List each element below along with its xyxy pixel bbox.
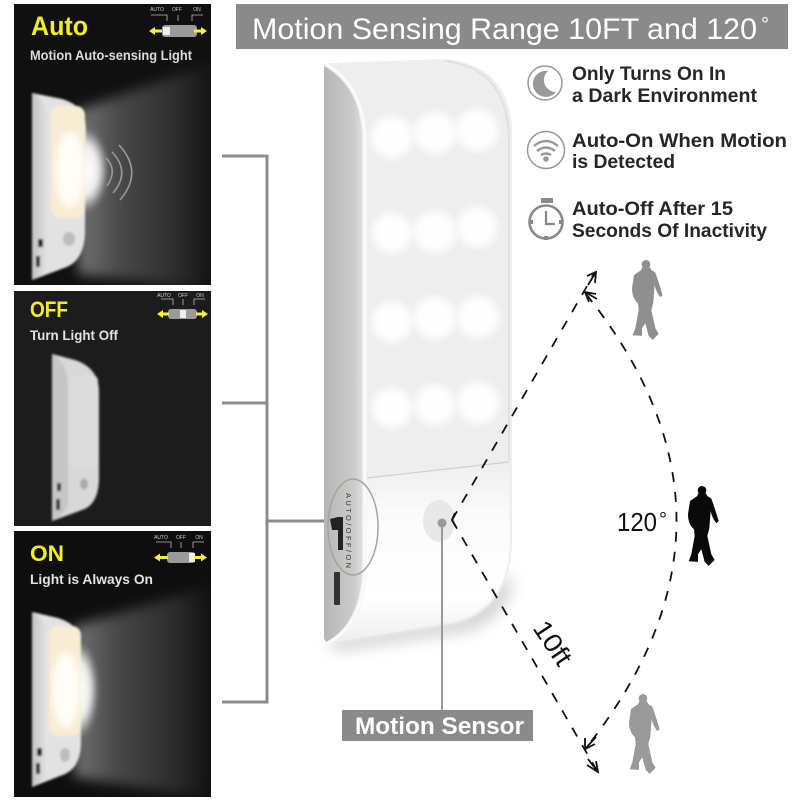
heading: Auto: Auto xyxy=(31,11,88,41)
switch diagram: Auto: OFF xyxy=(172,7,182,13)
title banner: ° xyxy=(761,14,769,36)
motion sensor lens xyxy=(423,500,455,542)
switch diagram: ON: ON xyxy=(195,535,203,541)
bracket connector xyxy=(222,156,328,702)
person: center xyxy=(688,486,719,566)
device side xyxy=(324,66,362,642)
person: bottom xyxy=(629,694,660,774)
feature text: auto off xyxy=(572,199,767,242)
icon: wifi motion xyxy=(528,132,564,168)
switch label: AUTO/OFF/ON xyxy=(344,493,353,568)
icon: timer xyxy=(530,198,563,240)
label: 10ft: 10ft xyxy=(527,615,579,672)
feature text: auto off: Auto-Off After 15 xyxy=(572,199,733,220)
light glow xyxy=(84,128,110,212)
device: unlit night light xyxy=(52,354,99,521)
switch diagram: OFF: OFF xyxy=(178,293,188,299)
title banner: Motion Sensing Range 10FT and 120 xyxy=(252,13,757,46)
panel: ON mode xyxy=(14,531,215,800)
switch diagram: ON xyxy=(154,535,207,563)
heading: OFF: OFF xyxy=(30,297,68,322)
device shadow xyxy=(328,570,512,652)
sensing range dashed lines xyxy=(452,274,676,769)
arrowheads xyxy=(585,272,598,772)
lower sensor section xyxy=(332,462,510,642)
panel: OFF mode xyxy=(14,291,211,526)
feature text: dark environment: a Dark Environment xyxy=(572,86,758,107)
light beam xyxy=(74,585,215,800)
label: 120 degrees: 120 xyxy=(617,507,657,537)
icon: moon xyxy=(528,66,562,100)
subheading: Light is Always On: Light is Always On xyxy=(30,572,153,587)
light glow xyxy=(80,644,100,736)
feature text: motion detected: Auto-On When Motion xyxy=(572,131,787,152)
switch callout oval xyxy=(328,479,378,575)
switch diagram: ON: AUTO xyxy=(154,535,168,541)
switch diagram: Auto xyxy=(149,7,207,37)
device: lit night light xyxy=(32,93,86,280)
light beam xyxy=(78,62,215,290)
feature text: dark environment xyxy=(572,64,758,107)
heading: ON: ON xyxy=(30,541,64,566)
feature text: motion detected xyxy=(572,131,787,173)
person: top xyxy=(632,260,663,340)
label: 120 degrees: ° xyxy=(659,509,667,531)
switch diagram: Auto: AUTO xyxy=(150,7,164,13)
feature text: motion detected: is Detected xyxy=(572,152,675,173)
motion sensor callout line xyxy=(438,518,446,712)
icon: motion waves xyxy=(106,145,132,200)
switch diagram: OFF: ON xyxy=(196,293,204,299)
subheading: Turn Light Off: Turn Light Off xyxy=(30,328,118,343)
feature text: auto off: Seconds Of Inactivity xyxy=(572,221,767,242)
sensor apex xyxy=(452,513,456,527)
subheading: Motion Auto-sensing Light: Motion Auto-sensing Light xyxy=(30,48,192,63)
USB port xyxy=(334,572,340,605)
LED lights xyxy=(366,104,504,433)
switch diagram: Auto: ON xyxy=(193,7,201,13)
switch diagram: OFF xyxy=(157,293,208,319)
device: lit night light xyxy=(32,612,81,787)
device body xyxy=(324,59,512,643)
title banner xyxy=(236,4,788,49)
switch diagram: ON: OFF xyxy=(176,535,186,541)
feature text: dark environment: Only Turns On In xyxy=(572,64,726,85)
mode switch xyxy=(330,517,343,550)
panel: Auto mode xyxy=(14,4,215,290)
main device: night light xyxy=(324,59,512,643)
motion sensor label: Motion Sensor xyxy=(355,713,524,740)
switch diagram: OFF: AUTO xyxy=(157,293,171,299)
